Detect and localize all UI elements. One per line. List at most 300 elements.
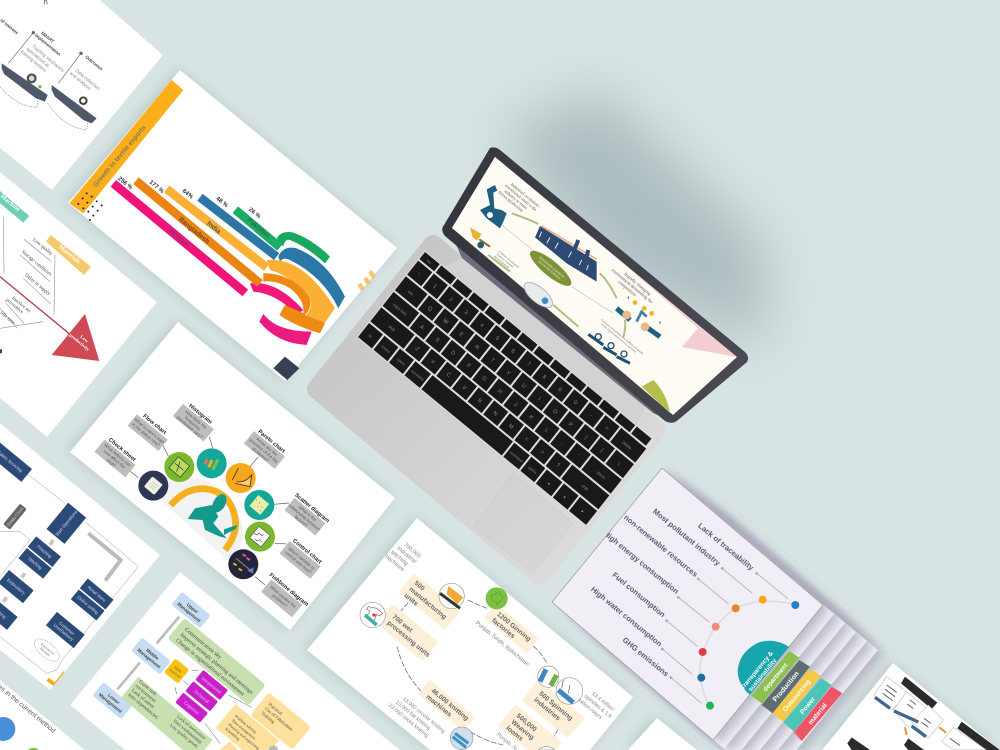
panel: stacked sustainability slide bbox=[552, 468, 878, 750]
gear and machine icons bbox=[27, 31, 87, 104]
key legends: command bbox=[509, 450, 523, 463]
header bar two bbox=[957, 722, 1000, 750]
label: pareto chart: problems? bbox=[251, 446, 270, 463]
dashed disposal ellipse: Disposal or bbox=[40, 642, 55, 656]
ribbon labels bbox=[166, 216, 271, 249]
key legends: caps lock bbox=[392, 302, 408, 317]
note: spindles: spindles & 1.9 bbox=[583, 694, 612, 720]
key legends: ASDFGHJKL;' bbox=[418, 324, 580, 459]
impact labels: Most pollutant industry bbox=[651, 507, 723, 568]
peach box: ginning: factories bbox=[490, 617, 516, 640]
label: fishbone diagram: What causes the bbox=[269, 584, 297, 609]
materials heading bbox=[46, 235, 91, 275]
step text: SMART implementation: SMART bbox=[40, 30, 55, 44]
icon: spinning machine bbox=[556, 678, 583, 704]
percentage labels: 256 % bbox=[116, 176, 134, 192]
impact labels: Use of non-renewable resources bbox=[602, 497, 699, 579]
label: histogram: Histogram bbox=[187, 403, 213, 426]
dome label: Transparency & bbox=[739, 650, 775, 691]
ribbon: Bangladesh bbox=[136, 181, 260, 283]
accent stripes bbox=[359, 271, 374, 290]
icon: cotton plant bbox=[486, 587, 508, 609]
step body: training: specialized at bbox=[25, 46, 51, 69]
key legends: shift bbox=[581, 483, 590, 492]
screen text: industrial revolution: transitional small scale bbox=[504, 183, 538, 212]
ribbon: Pakistan bbox=[235, 210, 280, 247]
tool: fishbone diagram bbox=[228, 549, 258, 579]
tool: histogram bbox=[197, 448, 227, 478]
screen: white plate icon bbox=[520, 278, 557, 312]
skill connectors bbox=[175, 670, 252, 743]
connector lines bbox=[8, 33, 81, 83]
screen text: industrial revolution: industry to mass bbox=[503, 188, 529, 210]
central shaded band bbox=[142, 477, 243, 565]
keyboard tray bbox=[357, 251, 654, 526]
box: embroidery: Embroidery bbox=[6, 578, 27, 596]
box: lower management: Lower bbox=[107, 693, 121, 705]
label: scatter diagram: relationship between bbox=[288, 503, 322, 532]
screen text: rapidly changing: competition bbox=[616, 280, 637, 298]
lower management duties text bbox=[126, 680, 208, 750]
step body: training: Training mechanics bbox=[31, 44, 65, 73]
box: upper management: Management bbox=[176, 601, 202, 624]
peach box: spinning bbox=[522, 680, 585, 738]
yellow notes middle text: Scheduling bbox=[224, 726, 241, 741]
key legends: esc bbox=[426, 258, 432, 265]
bar title: Growth in textile exports bbox=[92, 124, 148, 189]
box: finishing bbox=[28, 536, 61, 567]
cause text: Inactive set bbox=[10, 296, 31, 314]
impact arc bbox=[700, 601, 795, 706]
laptop lid bbox=[442, 147, 748, 423]
step body: data collection: and analysis bbox=[69, 71, 92, 91]
cause text: Storage conditions bbox=[20, 250, 52, 278]
screen pink shape bbox=[605, 248, 737, 357]
label: flow chart: in the status now? bbox=[131, 422, 162, 448]
screen text: bottom notes: on the organization services and lines bbox=[600, 322, 638, 354]
lower management duties text: Poor workmanship bbox=[172, 719, 203, 746]
label: flow chart: What is case's lead bbox=[133, 417, 165, 444]
percentage labels: 64% bbox=[181, 188, 194, 201]
peach box: ginning: 1200 Ginning bbox=[495, 611, 532, 643]
label: control chart: Which variable is bbox=[287, 546, 316, 571]
label: control chart bbox=[279, 537, 324, 579]
note: stitching machines: Industrial bbox=[396, 546, 417, 565]
box: middle management: Middle bbox=[145, 648, 160, 661]
screen: olive oval: across the industry bbox=[537, 259, 562, 281]
note: spindles: 13.4 million bbox=[590, 691, 615, 713]
label: fishbone diagram: problem? bbox=[271, 593, 289, 609]
note: spindles: million rotors bbox=[576, 697, 603, 721]
box: retail store: Retail store bbox=[87, 585, 107, 603]
keyboard bbox=[357, 251, 654, 526]
box: customer delivery bbox=[46, 612, 85, 648]
screen text: low notes: demand growth bbox=[493, 254, 510, 270]
blue tabs bbox=[875, 697, 926, 737]
impact labels: High water consumption bbox=[589, 585, 664, 649]
box: online selling: Online selling bbox=[76, 595, 100, 615]
peach box: knitting: machines bbox=[424, 694, 453, 719]
screen: handshake icon bbox=[617, 297, 660, 337]
peach box: manufacturing units: manufacturing bbox=[408, 586, 448, 621]
cause text: Delay in supply bbox=[23, 273, 51, 297]
materials label: Materials bbox=[57, 243, 82, 266]
stripe: material bbox=[794, 687, 842, 741]
label: scatter diagram: What is the bbox=[298, 505, 318, 522]
yellow notes lower bbox=[219, 742, 238, 750]
icon: loom bbox=[538, 747, 555, 750]
dashed cycle bbox=[397, 600, 558, 745]
yellow notes middle box bbox=[216, 704, 279, 750]
box: quality check bbox=[3, 504, 27, 530]
label: flow chart: Flow chart bbox=[141, 413, 167, 436]
peach box: knitting: 46,000 knitting bbox=[430, 687, 470, 722]
ribbon labels: China bbox=[226, 219, 245, 236]
impact labels: High energy consumption bbox=[602, 529, 681, 596]
upper management duties: Change in organizational environment bbox=[174, 638, 245, 698]
impact labels: Fuel consumption bbox=[611, 570, 667, 619]
key legends: ◄▲► bbox=[546, 480, 586, 514]
cause text: Low quality bbox=[31, 238, 54, 257]
label: pareto chart: Areas are the bbox=[255, 437, 279, 457]
laptop bbox=[317, 147, 748, 575]
box: fabric sourcing bbox=[0, 441, 32, 482]
key legends: ZXCVBNM<>? bbox=[414, 346, 561, 469]
box: finishing: Finishing bbox=[36, 544, 53, 559]
header bar one bbox=[901, 677, 937, 709]
laptop cast shadow bbox=[500, 90, 765, 350]
box: customer delivery: Use/Delivery bbox=[52, 622, 75, 642]
screen text: bottom notes: Customer demanding new fashion and goods bbox=[600, 318, 644, 355]
dashed loops bbox=[0, 87, 88, 130]
slide sheet edge bbox=[452, 157, 698, 380]
orange corner mark bbox=[48, 672, 65, 685]
screen: team icons bbox=[588, 334, 630, 363]
box: upper management: Upper bbox=[186, 602, 199, 615]
box: embroidery bbox=[0, 570, 34, 603]
lower management duties text: Guide task bbox=[137, 680, 157, 697]
step text: outcomes: Outcomes bbox=[84, 54, 104, 72]
blue icon bbox=[0, 717, 15, 741]
stripe: outsourcing bbox=[773, 669, 821, 722]
note cards bbox=[874, 677, 987, 750]
peach box: wet processing bbox=[376, 604, 440, 663]
impact labels: GHG emissions bbox=[621, 635, 670, 679]
yellow arc bbox=[171, 489, 236, 550]
lower management duties text: Lack of motivation bbox=[175, 715, 206, 741]
percentage labels bbox=[116, 176, 262, 221]
ribbon: China bbox=[200, 197, 277, 257]
card text lines bbox=[883, 685, 960, 746]
ribbon: India bbox=[167, 189, 267, 267]
arc: orange bbox=[263, 273, 325, 333]
label: scatter diagram bbox=[283, 493, 330, 537]
screen: olive oval: Sustainable practices bbox=[538, 255, 565, 279]
label: check sheet: Check sheet bbox=[107, 437, 137, 463]
note: stitching machines: 700,000 bbox=[402, 542, 422, 560]
stripe label: power: Power bbox=[799, 696, 817, 716]
upper management duties: Communication sky bbox=[183, 627, 222, 661]
green icon bbox=[28, 748, 39, 750]
screen text: low notes: Creation of enterprise bbox=[498, 249, 520, 269]
percentage labels: 48 % bbox=[214, 196, 229, 210]
arc: pink front bbox=[259, 314, 312, 345]
step body: training: training centers bbox=[20, 49, 48, 73]
label: pareto chart: Pareto chart bbox=[256, 429, 286, 455]
peach box: manufacturing units: units bbox=[402, 592, 419, 608]
effect label: productivity bbox=[68, 333, 90, 353]
feedback arrow bbox=[88, 533, 121, 581]
gray corner marker bbox=[269, 745, 278, 750]
icon: yarn spools bbox=[538, 666, 559, 687]
lower management duties text: Inter dependencies bbox=[126, 693, 159, 721]
box: retail store bbox=[80, 578, 114, 609]
peach box: ginning bbox=[484, 603, 539, 653]
box: middle management: Management bbox=[136, 647, 162, 670]
peach box: wet processing: processing units bbox=[386, 620, 431, 659]
yellow notes right: Practical bbox=[267, 702, 283, 717]
box: upper management bbox=[171, 592, 211, 628]
key legends: fn bbox=[367, 333, 373, 339]
effect triangle bbox=[52, 314, 99, 361]
label: pareto chart bbox=[244, 427, 288, 469]
stripe label: material: material bbox=[807, 702, 829, 726]
slab two bbox=[52, 85, 97, 123]
dome: transparency and sustainability bbox=[738, 641, 789, 695]
label: pareto chart: priorities of the big bbox=[249, 437, 279, 464]
upper management duties: Improve strategic planning and meetings bbox=[179, 632, 254, 696]
key legends: option bbox=[527, 466, 537, 475]
effect label: Low bbox=[79, 335, 89, 344]
panel: training implementation slide bbox=[0, 0, 163, 190]
box: online selling bbox=[71, 589, 105, 620]
step body: data collection: Data collection bbox=[74, 68, 101, 91]
dashed disposal ellipse bbox=[34, 638, 60, 662]
label: histogram bbox=[173, 399, 217, 442]
stripe label: outsourcing: Outsourcing bbox=[782, 678, 812, 713]
magenta: interpersonal: Interpersonal bbox=[200, 676, 223, 696]
icon: t-shirt bbox=[360, 602, 385, 628]
icon: knitting machine bbox=[450, 727, 473, 750]
front sheet bbox=[552, 468, 823, 740]
peach box: spinning: 500 Spinning bbox=[537, 690, 574, 722]
label: check sheet: dept? bbox=[106, 457, 118, 469]
label: histogram: distribution vary? bbox=[175, 415, 204, 440]
cause text bbox=[0, 238, 54, 327]
tool: check sheet bbox=[138, 471, 168, 501]
weaving label: Weaving bbox=[510, 719, 535, 741]
trackpad outline bbox=[473, 473, 573, 573]
note: ginning regions: Punjab, Sindh, Balochistan bbox=[474, 620, 530, 668]
key legends: return bbox=[596, 470, 607, 480]
peach box: spinning: industries bbox=[532, 697, 562, 722]
header bar three bbox=[847, 737, 870, 750]
upper management duties bbox=[168, 618, 266, 705]
box: start operations bbox=[47, 503, 86, 544]
box: cutting bbox=[0, 602, 18, 630]
yellow notes middle text: Planning and organizing bbox=[227, 722, 261, 750]
branch marker bbox=[0, 349, 2, 353]
percentage labels: 26 % bbox=[247, 207, 262, 221]
label: control chart: Control chart bbox=[291, 538, 322, 565]
box: middle management bbox=[131, 637, 171, 675]
panel: fishbone diagram slide bbox=[0, 172, 157, 437]
box: start operations: Start Operations bbox=[54, 509, 78, 537]
connectors bbox=[129, 437, 289, 585]
box: stitching bbox=[18, 548, 52, 579]
screen: worker icon bbox=[480, 185, 507, 228]
panel: quality tools slide bbox=[70, 322, 395, 630]
stripe: power bbox=[783, 678, 832, 732]
magenta: technical bbox=[185, 681, 218, 711]
label: histogram: How does the bbox=[184, 409, 208, 430]
skills required badge: Skills bbox=[173, 664, 183, 674]
peach box: wet processing: 700 wet bbox=[391, 613, 414, 634]
impact labels bbox=[589, 497, 756, 679]
key legends: command bbox=[410, 369, 424, 382]
box: stitching: Stitching bbox=[27, 556, 44, 571]
arc: green bbox=[277, 232, 330, 263]
label: scatter diagram: Scatter diagram bbox=[293, 493, 330, 524]
impact dots bbox=[697, 596, 799, 710]
key legends: shift bbox=[387, 324, 397, 333]
level arrows bbox=[117, 617, 179, 689]
key legends: QWERTYUIOP[]\ bbox=[426, 305, 621, 468]
ribbon labels: Bangladesh bbox=[177, 216, 211, 246]
step text: SMART implementation: implementation bbox=[34, 32, 62, 57]
skills required badge: required bbox=[168, 667, 182, 679]
note: knitting breakdown: 13,000 circular knitting bbox=[401, 696, 446, 735]
screen: factory icon bbox=[535, 226, 597, 282]
dashed disposal ellipse: Recycle bbox=[39, 647, 51, 657]
navy page tag bbox=[273, 357, 299, 380]
branches bbox=[0, 217, 55, 328]
ribbon: Vietnam bbox=[113, 183, 245, 293]
peach box: weaving bbox=[498, 704, 562, 750]
screen text: rapidly changing: Rapidly changing bbox=[623, 272, 651, 297]
machine heading bbox=[0, 191, 29, 223]
tool: flow chart bbox=[164, 452, 194, 482]
magenta: cognitive bbox=[175, 693, 208, 723]
key legends: ~1234567890-= bbox=[416, 271, 609, 432]
cause text: preventive bbox=[4, 298, 24, 316]
tool: pareto chart bbox=[226, 463, 256, 493]
label: flow chart bbox=[128, 410, 172, 451]
yellow notes right: Use of Fabrication bbox=[263, 707, 294, 733]
weaving label: 500,000 bbox=[515, 713, 538, 733]
box: customer delivery: Customer bbox=[58, 620, 76, 636]
stacked back sheets bbox=[552, 468, 878, 750]
laptop base bbox=[317, 245, 656, 575]
weaving label: looms bbox=[505, 725, 524, 743]
ribbon labels: Pakistan bbox=[245, 217, 271, 240]
speaker mesh bbox=[445, 257, 645, 426]
screen: olive arrows bbox=[488, 213, 625, 337]
label: check sheet bbox=[94, 435, 139, 477]
screen text: low notes: leads to customer bbox=[496, 252, 515, 269]
label: check sheet: now affect the bbox=[103, 448, 127, 470]
screen: thin guide lines bbox=[502, 225, 613, 313]
key legends bbox=[367, 258, 644, 514]
box: lower management: Management bbox=[98, 692, 123, 714]
screen green shape bbox=[642, 380, 670, 413]
panel: small slide corner bbox=[628, 718, 697, 750]
arc: pink back bbox=[250, 283, 303, 315]
yellow notes right bbox=[250, 692, 311, 750]
panel: process flow slide bbox=[0, 423, 160, 690]
stripe label: production: Production bbox=[772, 671, 801, 703]
panel: departments slide bbox=[822, 663, 1000, 750]
panel: textile industry map slide bbox=[307, 518, 633, 750]
leader end dots bbox=[661, 567, 758, 679]
dot pattern bbox=[77, 192, 103, 221]
key legends: tab bbox=[407, 289, 415, 297]
note: stitching machines: stitching bbox=[389, 549, 409, 567]
label: control chart: control and how? bbox=[284, 550, 313, 575]
label: histogram: frequency bbox=[184, 415, 202, 432]
screen text: industrial revolution: Industrial revolution - bbox=[510, 181, 542, 210]
impact labels: Lack of traceability bbox=[696, 521, 756, 573]
key legends: option bbox=[396, 357, 406, 367]
hinge bbox=[453, 238, 675, 423]
note: stitching machines: machines bbox=[383, 553, 405, 573]
icon: analyst figure bbox=[188, 492, 237, 538]
panel: management skills slide bbox=[70, 572, 400, 750]
yellow notes right: Training bbox=[260, 711, 276, 725]
slab one bbox=[2, 63, 48, 102]
lower management duties text: environment bbox=[134, 684, 157, 704]
icon: sewing machine bbox=[439, 583, 464, 609]
magenta: interpersonal bbox=[195, 670, 228, 700]
frame lines bbox=[0, 473, 138, 673]
screen text: industrial revolution: driven production bbox=[497, 189, 525, 213]
yellow notes middle text: Time management bbox=[231, 718, 257, 741]
lower management duties text: Lack of talent bbox=[130, 688, 155, 710]
key rows bbox=[364, 256, 650, 518]
panel: current method slide bbox=[0, 680, 85, 750]
box: quality check: Quality Check bbox=[6, 507, 24, 527]
screen: trophy icon bbox=[470, 227, 490, 248]
panel: growth in textile exports bbox=[68, 70, 397, 381]
stripe label: department: department bbox=[762, 661, 790, 693]
tool: control chart bbox=[245, 522, 275, 552]
screen bbox=[452, 157, 737, 415]
note: knitting breakdown: 10,000 flat knitting bbox=[394, 700, 431, 732]
label: fishbone diagram bbox=[258, 572, 309, 620]
stripe: department bbox=[751, 651, 799, 704]
lower management duties text: Low quality goods bbox=[168, 723, 199, 750]
arc: yellow bbox=[267, 260, 335, 325]
label: scatter diagram: factors? bbox=[294, 514, 309, 528]
screen text: rapidly changing: environment demanding the bbox=[610, 268, 653, 305]
lower management duties box bbox=[121, 677, 213, 750]
leader lines bbox=[662, 568, 788, 703]
screen: olive oval bbox=[526, 246, 576, 291]
key legends: delete bbox=[621, 440, 634, 451]
note: knitting breakdown: 23,000 socks knitting bbox=[387, 703, 429, 739]
ribbon labels: Vietnam bbox=[166, 227, 190, 249]
tool: scatter diagram bbox=[244, 490, 274, 520]
label: check sheet: What defects can bbox=[103, 443, 132, 468]
label: fishbone diagram: Fishbone diagram bbox=[268, 572, 309, 608]
header bar four bbox=[904, 738, 924, 750]
spine bbox=[0, 277, 70, 334]
ribbon labels: India bbox=[205, 220, 222, 236]
magenta: cognitive: Cognitive bbox=[182, 701, 200, 716]
yellow notes middle text: Problem solving bbox=[234, 714, 258, 734]
magenta: technical: Technical bbox=[192, 690, 210, 705]
peach box: manufacturing units: 500 bbox=[413, 580, 426, 592]
